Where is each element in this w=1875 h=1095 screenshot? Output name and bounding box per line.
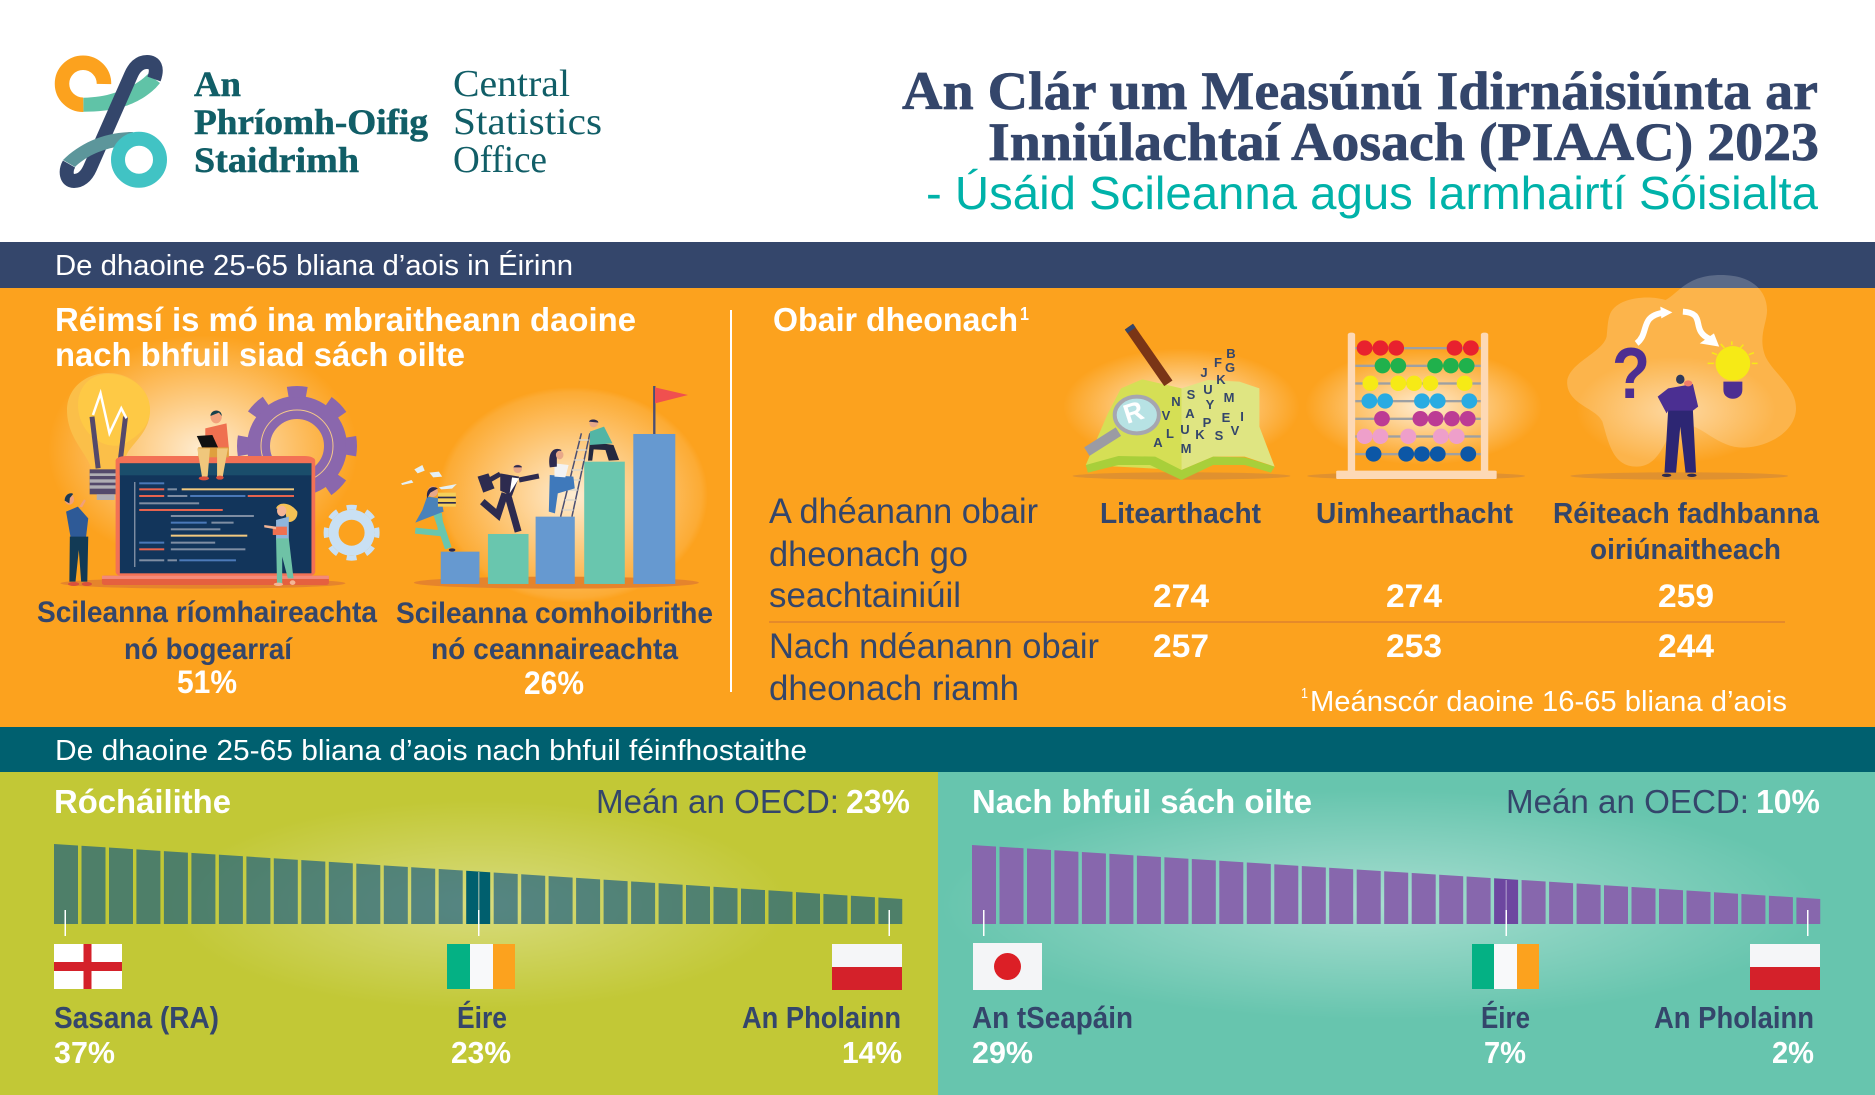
country labels and values: Éire xyxy=(1481,1000,1530,1035)
scattered letters: M xyxy=(1224,390,1234,405)
CSO logo mark xyxy=(62,62,160,181)
heading: areas of feeling under-skilled: Réimsí is mó ina mbraitheann daoine xyxy=(55,301,636,338)
scattered letters: F xyxy=(1214,355,1222,370)
table values: 274 xyxy=(1386,578,1442,614)
label: collaboration skills 26%: nó ceannaireachta xyxy=(431,633,678,666)
scattered letters: V xyxy=(1162,408,1171,423)
scattered letters: G xyxy=(1225,360,1235,375)
flag: Ireland xyxy=(1472,944,1539,989)
row labels: Nach ndéanann obair xyxy=(769,627,1099,666)
papers xyxy=(401,465,457,489)
band: population in Ireland xyxy=(0,242,1875,288)
footnote: Meánscór daoine 16-65 bliana d’aois xyxy=(1310,686,1787,718)
scattered letters: A xyxy=(1185,406,1195,421)
country labels and values: 37% xyxy=(54,1035,115,1070)
country labels and values xyxy=(972,1000,1814,1070)
panel: over-qualified xyxy=(0,772,938,1095)
country labels and values: Éire xyxy=(457,1000,507,1035)
icon: purple gear xyxy=(242,392,352,500)
flag: Ireland xyxy=(447,944,515,989)
scattered letters: K xyxy=(1216,372,1226,387)
band: employees: De dhaoine 25-65 bliana d’aois nach bhfuil féinfhostaithe xyxy=(55,735,807,767)
row labels xyxy=(769,492,1099,708)
illustration: computing skills xyxy=(48,335,377,589)
OECD average: 10% xyxy=(1756,783,1820,820)
heading: useful work: 1 xyxy=(1020,304,1029,324)
column headings xyxy=(1100,498,1820,566)
label: computing skills 51% xyxy=(37,596,377,700)
panel: under-skilled xyxy=(938,772,1875,1095)
scattered letters: U xyxy=(1203,382,1213,397)
logo text: English name: Central xyxy=(453,63,570,105)
illustration: collaboration or leadership xyxy=(401,386,708,603)
person sitting on laptop xyxy=(197,410,229,480)
person standing left xyxy=(65,493,92,586)
illustration: literacy book: R xyxy=(1120,395,1147,430)
label: computing skills 51%: Scileanna ríomhaireachta xyxy=(37,596,377,629)
heading: areas of feeling under-skilled xyxy=(55,301,636,373)
table values: 274 xyxy=(1153,578,1209,614)
scattered letters: V xyxy=(1231,423,1240,438)
logo text: English name: Office xyxy=(453,139,547,181)
running man with briefcase xyxy=(478,464,539,532)
scattered letters: A xyxy=(1153,435,1163,450)
label: collaboration skills 26%: 26% xyxy=(524,665,584,701)
scattered letters: I xyxy=(1240,409,1244,424)
light bulb xyxy=(1708,341,1758,399)
header panel xyxy=(0,0,1875,242)
title: - Úsáid Scileanna agus Iarmhairtí Sóisialta xyxy=(926,167,1818,219)
bar chart xyxy=(972,840,1820,924)
logo text: Irish name: Phríomh-Oifig xyxy=(194,102,428,142)
logo text: Irish name: Staidrimh xyxy=(194,140,359,180)
label: collaboration skills 26%: Scileanna comhoibrithe xyxy=(396,597,713,630)
thinking man xyxy=(1658,375,1698,477)
tick marks xyxy=(64,872,890,936)
heading: Rócháilithe xyxy=(54,783,231,820)
table values: 259 xyxy=(1658,578,1714,614)
OECD average: Meán an OECD: xyxy=(596,783,839,820)
row labels: A dhéanann obair xyxy=(769,492,1038,531)
country labels and values: 29% xyxy=(972,1035,1033,1070)
country labels and values: Sasana (RA) xyxy=(54,1000,219,1035)
scattered letters: K xyxy=(1195,427,1205,442)
row labels: seachtainiúil xyxy=(769,576,961,615)
band: employees xyxy=(0,727,1875,772)
table values: 253 xyxy=(1386,628,1442,664)
icon: light gear xyxy=(326,507,377,558)
country labels and values: 14% xyxy=(842,1035,902,1070)
flag: Japan xyxy=(973,943,1042,990)
row labels: dheonach go xyxy=(769,535,968,574)
label: computing skills 51%: nó bogearraí xyxy=(124,633,294,666)
country labels and values: An tSeapáin xyxy=(972,1000,1133,1035)
table: useful work scores xyxy=(769,492,1820,718)
running woman with files xyxy=(415,486,456,552)
column headings: Litearthacht xyxy=(1100,498,1261,530)
scattered letters xyxy=(1153,346,1244,456)
heading: Nach bhfuil sách oilte xyxy=(972,783,1312,820)
scattered letters: L xyxy=(1166,426,1174,441)
scattered letters: Y xyxy=(1206,397,1215,412)
country labels and values: 2% xyxy=(1772,1035,1814,1070)
illustration: problem solving xyxy=(1567,275,1796,480)
scattered letters: M xyxy=(1181,441,1191,456)
flag: Poland xyxy=(832,944,902,990)
country labels and values: An Pholainn xyxy=(742,1000,901,1035)
OECD average: 23% xyxy=(846,783,910,820)
country labels and values xyxy=(54,1000,902,1070)
footnote: 1 xyxy=(1301,685,1308,702)
column headings: Réiteach fadhbanna xyxy=(1553,498,1820,530)
row labels: dheonach riamh xyxy=(769,669,1019,708)
divider xyxy=(730,310,732,692)
laptop with code xyxy=(60,410,345,589)
bar chart xyxy=(54,840,902,924)
tick marks xyxy=(983,880,1808,936)
heading: useful work: Obair dheonach xyxy=(773,301,1018,338)
band: population in Ireland: De dhaoine 25-65 bliana d’aois in Éirinn xyxy=(55,249,573,282)
title xyxy=(902,61,1819,219)
logo text: English name xyxy=(453,63,602,181)
scattered letters: S xyxy=(1187,387,1196,402)
scattered letters: N xyxy=(1171,394,1181,409)
logo text: Irish name xyxy=(194,64,428,180)
scattered letters: B xyxy=(1226,346,1236,361)
title: Inniúlachtaí Aosach (PIAAC) 2023 xyxy=(988,112,1819,172)
heading: areas of feeling under-skilled: nach bhfuil siad sách oilte xyxy=(55,336,465,373)
orange panel xyxy=(0,275,1875,727)
illustration: literacy book xyxy=(1063,327,1300,480)
scattered letters: S xyxy=(1215,428,1224,443)
column headings: oiriúnaitheach xyxy=(1590,534,1781,566)
column headings: Uimhearthacht xyxy=(1316,498,1513,530)
table values: 257 xyxy=(1153,628,1209,664)
illustration: numeracy abacus xyxy=(1305,333,1542,480)
logo text: English name: Statistics xyxy=(453,101,602,143)
scattered letters: U xyxy=(1180,422,1190,437)
ladder and climbing woman xyxy=(549,433,590,517)
table values: 244 xyxy=(1658,628,1714,664)
label: computing skills 51%: 51% xyxy=(177,664,237,700)
question mark: ? xyxy=(1612,334,1650,414)
country labels and values: 23% xyxy=(451,1035,511,1070)
flag: England xyxy=(54,944,122,989)
table values xyxy=(1153,578,1714,664)
country labels and values: An Pholainn xyxy=(1654,1000,1814,1035)
flag: Poland xyxy=(1750,944,1820,990)
person standing right xyxy=(264,504,297,586)
kneeling man on top xyxy=(588,419,619,461)
scattered letters: E xyxy=(1222,410,1231,425)
title: An Clár um Measúnú Idirnáisiúnta ar xyxy=(902,61,1818,121)
OECD average: Meán an OECD: xyxy=(1506,783,1749,820)
label: collaboration skills 26% xyxy=(396,597,713,701)
scattered letters: J xyxy=(1200,365,1208,380)
country labels and values: 7% xyxy=(1484,1035,1526,1070)
scattered letters: P xyxy=(1203,415,1212,430)
logo text: Irish name: An xyxy=(194,64,241,104)
